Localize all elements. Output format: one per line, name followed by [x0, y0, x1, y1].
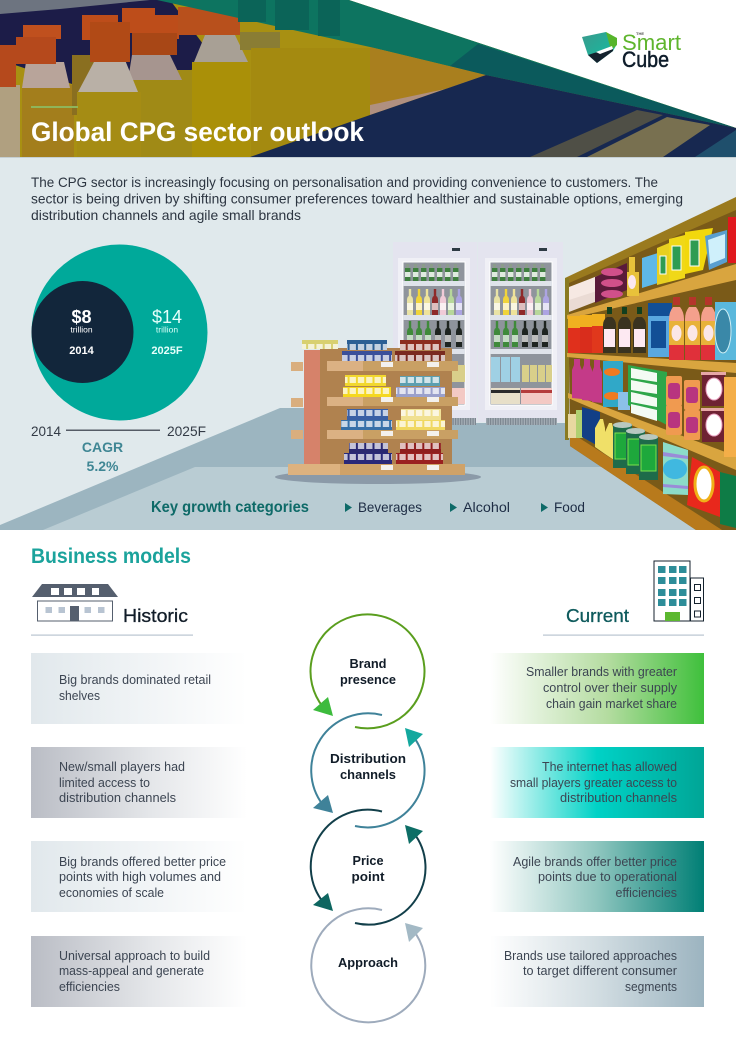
shelf products: second row	[568, 297, 736, 360]
title: Global CPG sector outlook	[31, 117, 365, 147]
diagram: approach cycle	[311, 908, 425, 1022]
intro paragraph	[31, 174, 683, 223]
panel: current price point: points due to operational	[538, 870, 677, 884]
arrow: beverages	[345, 503, 352, 512]
panel: historic approach	[31, 936, 247, 1007]
panel: historic distribution channels: distribution channels	[59, 791, 176, 805]
chart: market size circles	[32, 244, 208, 420]
diagram: price point cycle: Price	[352, 853, 384, 868]
chart: market size circles: $8	[71, 307, 92, 327]
chart: market size circles: trillion	[70, 324, 93, 334]
accent rule	[31, 106, 78, 108]
chart: market size circles: trillion	[156, 324, 178, 334]
panel: historic price point: points with high volumes and	[59, 870, 221, 884]
panel: historic price point	[31, 841, 247, 912]
panel: current brand presence: Smaller brands with greater	[526, 665, 677, 679]
arrow: food	[541, 503, 548, 512]
diagram: price point cycle: point	[352, 869, 385, 884]
panel: historic brand presence	[31, 653, 247, 724]
illustration: drinks fridges	[393, 242, 563, 425]
chart: market size circles: 2014	[69, 345, 95, 357]
intro paragraph: distribution channels and agile small brands	[31, 207, 301, 223]
teal translucent band	[157, 0, 736, 128]
panel: current price point: Agile brands offer better price	[513, 855, 677, 869]
panel: sector outlook background	[0, 157, 736, 530]
key growth categories: Alcohol	[463, 499, 510, 515]
logo: The Smart Cube: Cube	[622, 47, 669, 72]
header photo banner	[0, 0, 736, 157]
gondola products	[302, 340, 445, 470]
panel: historic approach: Universal approach to build	[59, 949, 210, 963]
chart: market size circles: 2025F	[151, 345, 183, 357]
arrow: alcohol	[450, 503, 457, 512]
panel: historic price point: economies of scale	[59, 886, 164, 900]
panel: historic brand presence: Big brands dominated retail	[59, 673, 211, 687]
key growth categories: Beverages	[358, 499, 422, 515]
panel: historic brand presence: shelves	[59, 689, 100, 703]
panel: current brand presence: chain gain market share	[546, 697, 677, 711]
illustration: side shelving unit	[565, 197, 736, 530]
fridge bottles	[405, 264, 552, 404]
shelf products: third row	[572, 359, 736, 457]
diagram: price point cycle	[311, 810, 426, 925]
panel: historic price point: Big brands offered better price	[59, 855, 226, 869]
CAGR timeline: 2014	[31, 423, 61, 439]
diagram: brand presence cycle	[311, 614, 425, 728]
intro paragraph: sector is being driven by shifting consumer preferences toward healthier and sustainable options, emerging	[31, 190, 683, 206]
heading: business models: Business models	[31, 545, 191, 568]
panel: current distribution channels: distribution channels	[560, 791, 677, 805]
panel: current brand presence: control over their supply	[543, 681, 678, 695]
panel: current brand presence	[490, 653, 704, 724]
panel: current approach: Brands use tailored approaches	[504, 949, 677, 963]
shelf products: top row	[569, 217, 736, 312]
panel: historic distribution channels	[31, 747, 247, 818]
CAGR timeline: 2025F	[167, 423, 206, 439]
bottles in photo	[0, 7, 370, 157]
heading: current: Current	[566, 606, 629, 626]
diagram: approach cycle: Approach	[338, 955, 398, 970]
diagram: brand presence cycle: presence	[340, 672, 396, 687]
logo: The Smart Cube: THE	[636, 31, 644, 36]
panel: current price point	[490, 841, 704, 912]
panel: current distribution channels	[490, 747, 704, 818]
logo: The Smart Cube	[582, 30, 681, 72]
panel: historic approach: mass-appeal and generate	[59, 964, 204, 978]
key growth categories: Key growth categories	[151, 499, 309, 516]
intro paragraph: The CPG sector is increasingly focusing on personalisation and providing convenience to customers. The	[31, 174, 658, 190]
panel: historic distribution channels: limited access to	[59, 776, 150, 790]
panel: current distribution channels: The internet has allowed	[542, 760, 677, 774]
panel: historic approach: efficiencies	[59, 980, 120, 994]
key growth categories	[151, 499, 585, 516]
panel: current approach	[490, 936, 704, 1007]
panel: current approach: segments	[625, 980, 677, 994]
panel: historic distribution channels: New/small players had	[59, 760, 185, 774]
panel: current approach: to target different consumer	[523, 964, 677, 978]
chart: market size circles: $14	[152, 307, 182, 327]
diagram: distribution channels cycle	[311, 713, 425, 827]
diagram: distribution channels cycle: Distribution	[330, 751, 406, 766]
CAGR timeline: CAGR	[82, 439, 123, 455]
icon: historic store	[32, 584, 118, 621]
panel: current distribution channels: small players greater access to	[510, 776, 677, 790]
heading: historic: Historic	[123, 606, 188, 626]
illustration: gondola display	[275, 340, 481, 484]
shelf products: bottom row	[568, 407, 736, 530]
diagram: brand presence cycle: Brand	[350, 656, 387, 671]
icon: current office building	[654, 561, 704, 621]
diagram: distribution channels cycle: channels	[340, 767, 396, 782]
CAGR timeline	[31, 423, 206, 474]
CAGR timeline: 5.2%	[87, 458, 119, 474]
panel: current price point: efficiencies	[616, 886, 677, 900]
logo: The Smart Cube: Smart	[622, 30, 681, 55]
key growth categories: Food	[554, 499, 585, 515]
